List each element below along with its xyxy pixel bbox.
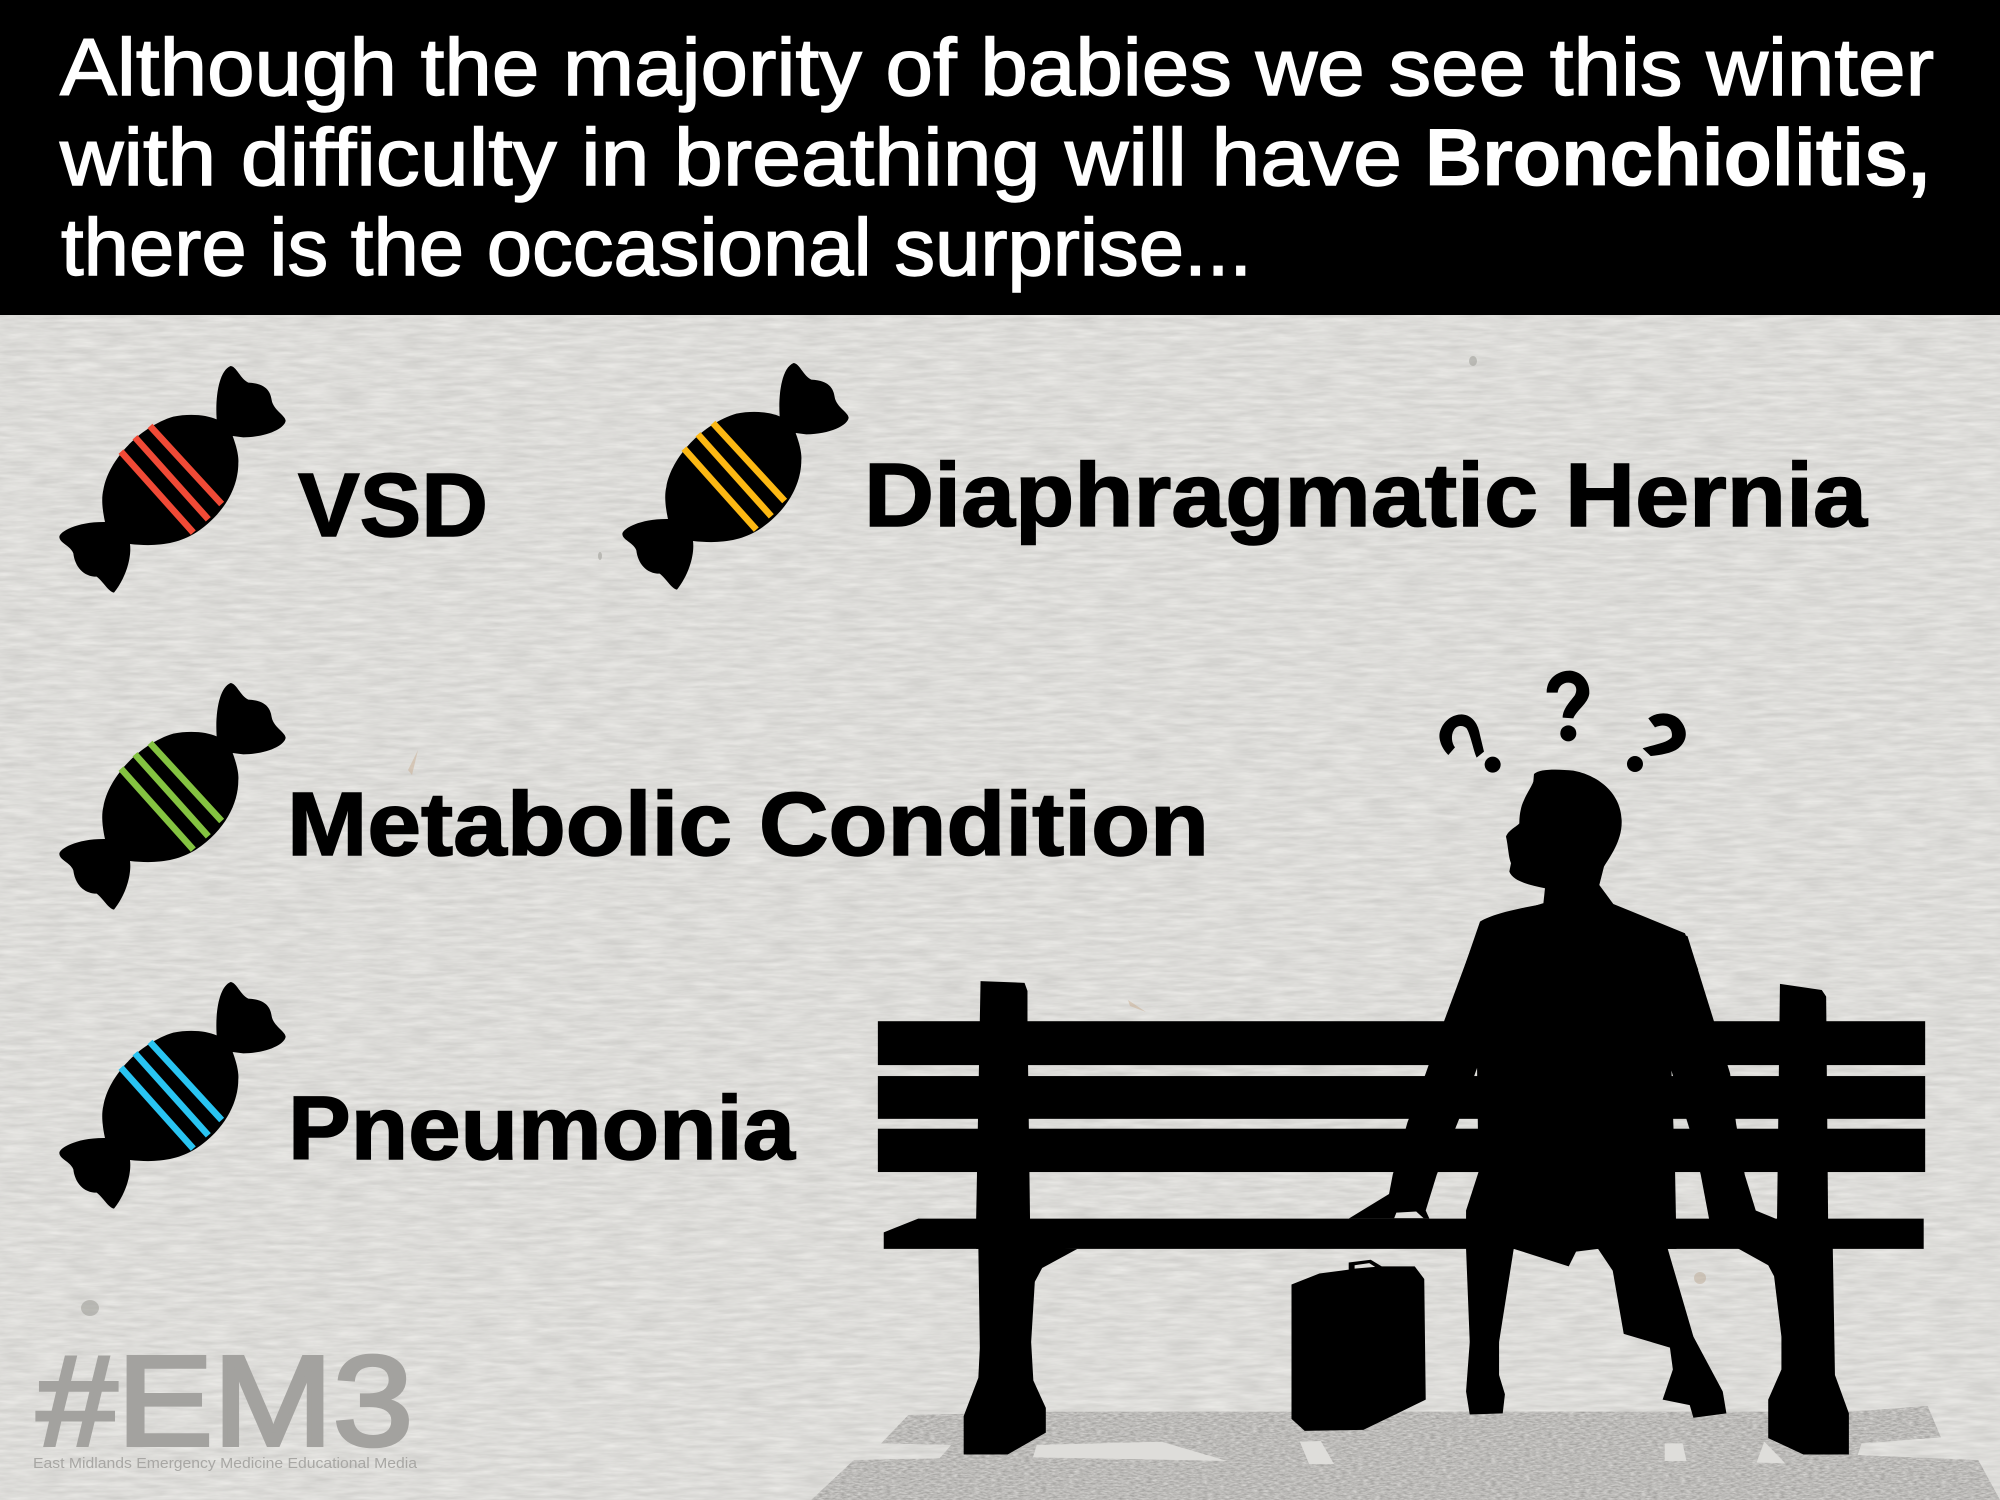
- header line 2: with difficulty in breathing will have: [59, 113, 1402, 203]
- item: VSD: [59, 366, 488, 593]
- header line 2: Bronchiolitis,: [1425, 113, 1930, 203]
- label: Metabolic Condition: Metabolic Condition: [287, 775, 1209, 875]
- label: Pneumonia: Pneumonia: [288, 1079, 796, 1179]
- header line 1: Although the majority of babies we see this winter: [60, 23, 1934, 113]
- item: Pneumonia: [59, 982, 796, 1209]
- icon: red-striped sweet: [59, 366, 286, 593]
- label: Diaphragmatic Hernia: Diaphragmatic Hernia: [864, 446, 1868, 546]
- logo wordmark: #EM3: [37, 1330, 413, 1473]
- paper flecks: [81, 356, 1706, 1316]
- header line 2: [59, 113, 1930, 203]
- logo: #EM3: [33, 1330, 418, 1473]
- item: Metabolic Condition: [59, 683, 1209, 910]
- logo tagline: East Midlands Emergency Medicine Educational Media: [33, 1455, 418, 1472]
- icon: blue-striped sweet: [59, 982, 286, 1209]
- man head and shoulders: [1463, 770, 1698, 970]
- header line 3: there is the occasional surprise...: [61, 203, 1252, 293]
- header banner: [0, 0, 2000, 315]
- item: Diaphragmatic Hernia: [622, 363, 1868, 590]
- label: VSD: VSD: [298, 456, 488, 556]
- man sitting on bench: [1349, 770, 1776, 1418]
- icon: green-striped sweet: [59, 683, 286, 910]
- man body and legs: [1349, 903, 1776, 1418]
- icon: question marks above head: [1439, 671, 1686, 773]
- bench: [878, 981, 1925, 1455]
- icon: yellow-striped sweet: [622, 363, 849, 590]
- briefcase: [1292, 1260, 1426, 1431]
- pavement under the bench: [811, 1406, 2000, 1500]
